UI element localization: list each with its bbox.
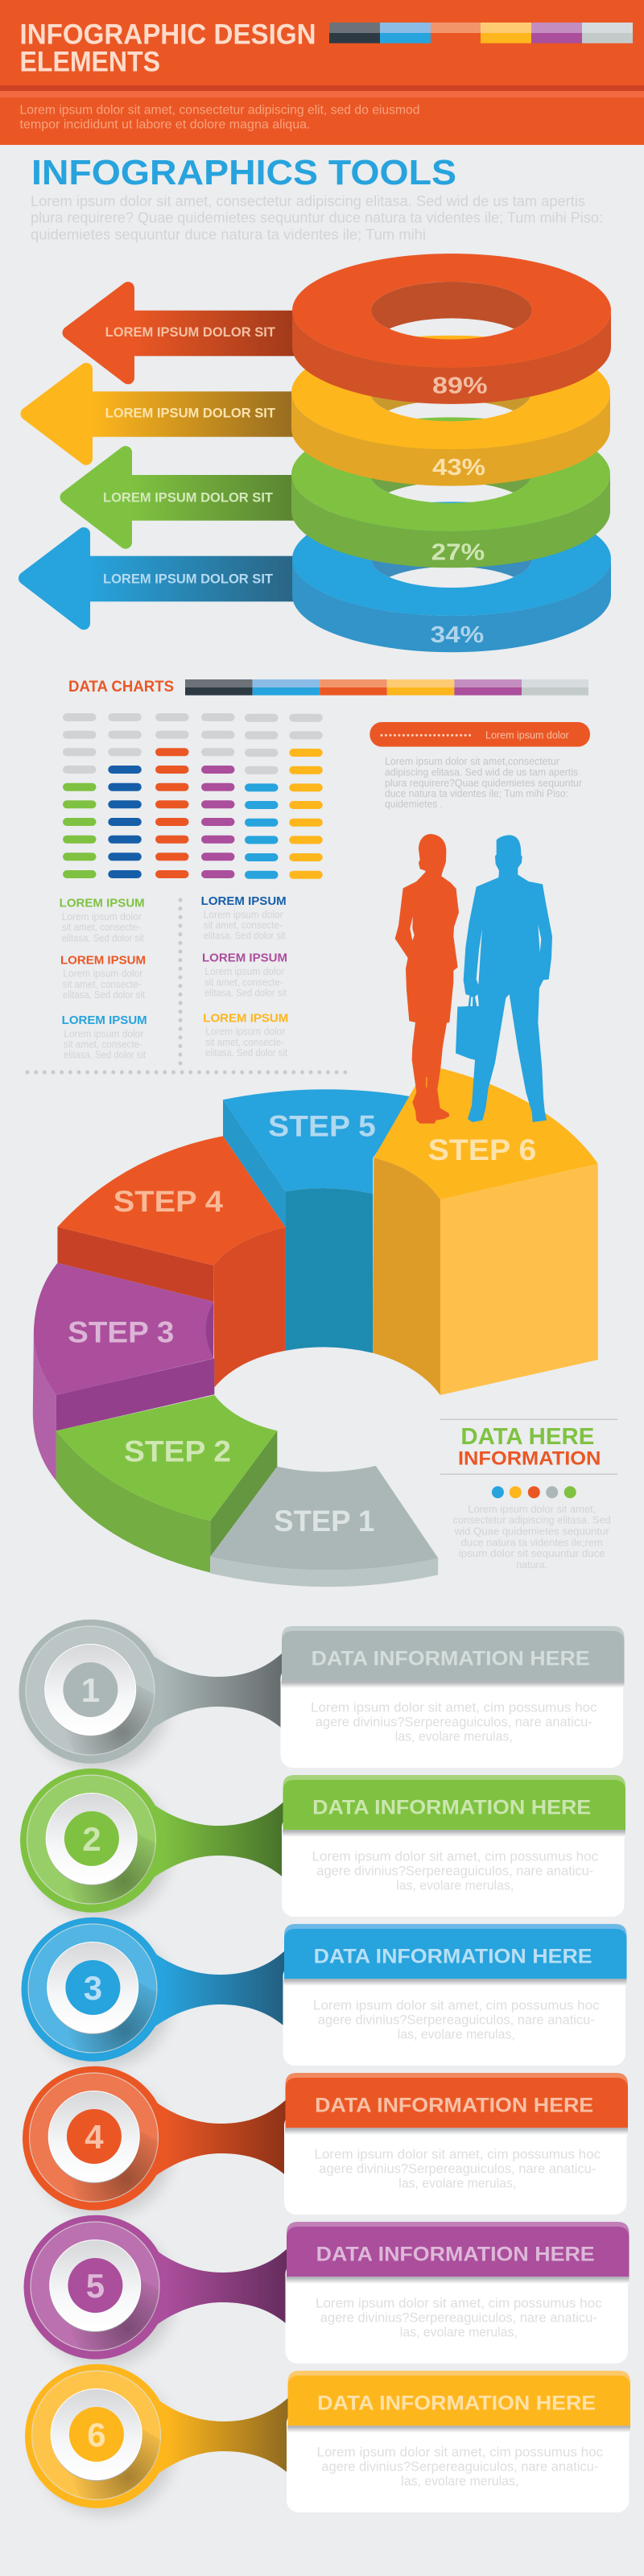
legend: blue: LOREM IPSUM [62, 1013, 147, 1027]
badge [25, 2364, 169, 2508]
drop shadow [34, 2079, 172, 2217]
badge: 4 [85, 2118, 104, 2156]
ring percentages: 27% [431, 540, 485, 566]
arrow: orange [69, 288, 295, 378]
step labels: STEP 6 [428, 1133, 536, 1166]
ring: green [291, 417, 610, 568]
step 2 segment [56, 1395, 277, 1573]
legend: purple: sit amet, consecte- [204, 976, 283, 988]
connector [142, 2238, 287, 2337]
card: Lorem ipsum dolor sit amet, cim possumus hoc [317, 2445, 604, 2460]
callout paragraph: Lorem ipsum dolor sit amet,consectetur [385, 756, 559, 767]
card [284, 2073, 628, 2215]
step 1 segment [210, 1466, 438, 1587]
ring percentages [431, 373, 488, 648]
legend: green: sit amet, consecte- [62, 922, 141, 933]
card: DATA INFORMATION HERE [316, 2243, 595, 2265]
information text: natura. [516, 1558, 547, 1571]
heading: infographics tools: INFOGRAPHICS TOOLS [31, 153, 456, 192]
chart: pill column 3 [155, 713, 188, 878]
chart: pill column 1 [63, 713, 97, 878]
information text [453, 1503, 611, 1571]
legend: yellow: LOREM IPSUM [203, 1012, 288, 1026]
card: Lorem ipsum dolor sit amet, cim possumus hoc [313, 1998, 600, 2013]
badge [20, 1769, 164, 1913]
badge [24, 2215, 167, 2359]
info row 6 [25, 2364, 630, 2515]
card: DATA INFORMATION HERE [314, 1945, 592, 1967]
colour dots [492, 1486, 576, 1498]
card: las, evolare merulas, [400, 2324, 518, 2339]
icon: businessman silhouette with briefcase [456, 835, 552, 1122]
callout paragraph: quidemietes . [385, 799, 443, 810]
ring: yellow [291, 336, 610, 486]
panel: stacked ring chart with arrows [25, 254, 611, 652]
step 4 segment [57, 1136, 286, 1388]
arrow: yellow [27, 369, 295, 459]
arrow labels: LOREM IPSUM DOLOR SIT [105, 324, 276, 340]
callout pill [369, 722, 590, 747]
callout paragraph: adipiscing elitasa. Sed wid de us tam apertis [385, 766, 578, 778]
heading: data here: DATA HERE [460, 1424, 594, 1450]
legend: yellow: sit amet, consecte- [205, 1037, 284, 1048]
badge [21, 1918, 166, 2062]
card: Lorem ipsum dolor sit amet, cim possumus hoc [314, 2147, 601, 2162]
step 5 segment [223, 1089, 414, 1353]
arrow labels [103, 324, 276, 586]
legend: purple: Lorem ipsum dolor [204, 966, 284, 977]
legend: dark blue: sit amet, consecte- [204, 920, 283, 931]
ring: blue [292, 502, 611, 652]
info row 5 [24, 2215, 630, 2366]
legend: orange: LOREM IPSUM [60, 953, 146, 967]
ring: orange [292, 254, 611, 404]
badge [23, 2066, 167, 2211]
title: ELEMENTS [19, 46, 160, 77]
title [19, 19, 316, 77]
colour strip [329, 23, 633, 43]
card: las, evolare merulas, [395, 1728, 513, 1744]
card: Lorem ipsum dolor sit amet, cim possumus hoc [311, 1700, 597, 1715]
drop shadow [33, 1930, 171, 2068]
step labels [68, 1109, 536, 1538]
badge: 3 [84, 1969, 102, 2007]
legend: yellow: Lorem ipsum dolor [205, 1026, 285, 1038]
card: Lorem ipsum dolor sit amet, cim possumus hoc [316, 2296, 602, 2311]
arrow labels: LOREM IPSUM DOLOR SIT [105, 406, 276, 421]
legend: yellow [203, 1012, 288, 1059]
legend: purple: elitasa. Sed dolor sit [204, 987, 287, 998]
step labels: STEP 1 [274, 1504, 374, 1538]
drop shadow [31, 1632, 169, 1770]
card: agere divinius?Serpereaguiculos, nare anaticu- [321, 2458, 598, 2474]
info row 2 [20, 1769, 625, 1919]
legend: green: LOREM IPSUM [60, 897, 145, 910]
card [283, 1924, 626, 2066]
legend: blue: sit amet, consecte- [64, 1039, 142, 1051]
card: las, evolare merulas, [401, 2473, 518, 2488]
panel: 3D step ring [33, 1065, 598, 1587]
card [287, 2371, 630, 2512]
card [282, 1775, 625, 1917]
legend: green: Lorem ipsum dolor [62, 911, 142, 923]
card: agere divinius?Serpereaguiculos, nare anaticu- [319, 2161, 596, 2176]
legend: orange: sit amet, consecte- [63, 979, 142, 990]
card: DATA INFORMATION HERE [315, 2094, 593, 2116]
ring percentages: 34% [431, 622, 484, 648]
drop shadow [35, 2227, 174, 2366]
step labels: STEP 5 [268, 1109, 376, 1143]
card: DATA INFORMATION HERE [317, 2392, 596, 2414]
callout paragraph: plura requirere?Quae quidemietes sequuntur [385, 778, 582, 789]
badge: 5 [86, 2267, 105, 2305]
banner subtitle: Lorem ipsum dolor sit amet, consectetur adipiscing elit, sed do eiusmod [19, 104, 420, 118]
legend: dark blue [201, 894, 287, 942]
header banner [0, 0, 644, 145]
legend: dark blue: Lorem ipsum dolor [204, 909, 283, 920]
card: agere divinius?Serpereaguiculos, nare anaticu- [316, 1714, 592, 1729]
info row 4 [23, 2066, 628, 2217]
step labels: STEP 4 [114, 1184, 223, 1218]
card: agere divinius?Serpereaguiculos, nare anaticu- [320, 2310, 597, 2325]
callout paragraph [385, 756, 582, 810]
chart: pill column 5 [245, 714, 279, 879]
card: DATA INFORMATION HERE [312, 1796, 591, 1818]
card: las, evolare merulas, [398, 2175, 516, 2190]
card: Lorem ipsum dolor sit amet, cim possumus hoc [312, 1849, 599, 1864]
ring percentages: 89% [432, 373, 488, 398]
panel: data here information [440, 1419, 617, 1571]
card: DATA INFORMATION HERE [312, 1647, 590, 1670]
intro paragraph [31, 193, 603, 242]
drop shadow [37, 2376, 175, 2515]
badge: 6 [87, 2416, 106, 2454]
arrow: blue [25, 534, 295, 623]
step 3 segment [33, 1263, 214, 1481]
legend: blue: Lorem ipsum dolor [64, 1029, 143, 1040]
arrow labels: LOREM IPSUM DOLOR SIT [103, 571, 274, 586]
legend: orange [60, 953, 146, 1001]
information text: ipsum dolor sit sequuntur duce [459, 1547, 605, 1559]
heading: data charts: DATA CHARTS [68, 679, 174, 696]
drop shadow [32, 1781, 171, 1919]
info row 1 [19, 1620, 625, 1770]
connector [143, 2387, 288, 2486]
information text: wid Quae quidemietes sequuntur [454, 1525, 609, 1537]
arrow: green [66, 452, 295, 543]
chart: pill column 2 [108, 713, 142, 878]
intro paragraph: Lorem ipsum dolor sit amet, consectetur adipiscing elitasa. Sed wid de us tam apertis [31, 193, 585, 209]
card: las, evolare merulas, [398, 2026, 515, 2041]
legend: dark blue: LOREM IPSUM [201, 894, 287, 908]
badge [19, 1620, 163, 1764]
banner subtitle: tempor incididunt ut labore et dolore magna aliqua. [19, 118, 311, 131]
legend: orange: Lorem ipsum dolor [63, 968, 142, 980]
callout paragraph: duce natura ta videntes ile; Tum mihi Piso: [385, 788, 568, 799]
connector [139, 1940, 284, 2039]
heading: information: INFORMATION [458, 1448, 601, 1470]
step labels: STEP 2 [124, 1435, 231, 1468]
connector [137, 1642, 282, 1741]
legend: yellow: elitasa. Sed dolor sit [205, 1047, 287, 1059]
ring percentages: 43% [432, 455, 485, 481]
badge: 1 [81, 1671, 100, 1709]
banner subtitle [19, 104, 420, 131]
legend: orange: elitasa. Sed dolor sit [63, 989, 145, 1001]
step labels: STEP 3 [68, 1315, 174, 1349]
title: INFOGRAPHIC DESIGN [19, 19, 316, 50]
card: agere divinius?Serpereaguiculos, nare anaticu- [316, 1863, 593, 1878]
legend: blue: elitasa. Sed dolor sit [64, 1050, 146, 1061]
chart: pill column 6 [289, 714, 323, 879]
badge: 2 [82, 1820, 101, 1858]
intro paragraph: plura requirere? Quae quidemietes sequuntur duce natura ta videntes ile; Tum mihi Piso: [31, 210, 603, 226]
card [280, 1626, 625, 1768]
card [285, 2222, 630, 2363]
connector [138, 1791, 283, 1890]
step 6 segment [373, 1065, 598, 1395]
legend: green [60, 897, 145, 943]
information text: consectetur adipiscing elitasa. Sed [453, 1514, 611, 1526]
colour strip: data charts [185, 679, 588, 696]
icon: businesswoman silhouette [395, 834, 459, 1124]
legend: blue [62, 1013, 147, 1061]
legend: purple: LOREM IPSUM [202, 952, 287, 965]
chart: pill column 4 [201, 713, 235, 878]
information text: duce natura ta videntes ile;rem [461, 1536, 603, 1548]
card: agere divinius?Serpereaguiculos, nare anaticu- [318, 2012, 595, 2027]
arrow labels: LOREM IPSUM DOLOR SIT [103, 490, 274, 506]
information text: Lorem ipsum dolor sit amet, [468, 1503, 596, 1515]
info row 3 [21, 1918, 626, 2068]
connector [140, 2089, 285, 2188]
legend: green: elitasa. Sed dolor sit [62, 932, 144, 943]
legend: purple [202, 952, 287, 998]
legend: dark blue: elitasa. Sed dolor sit [204, 931, 286, 942]
card: las, evolare merulas, [396, 1877, 514, 1893]
intro paragraph: quidemietes sequuntur duce natura ta videntes ile; Tum mihi [31, 226, 426, 242]
callout pill: Lorem ipsum dolor [485, 729, 569, 741]
